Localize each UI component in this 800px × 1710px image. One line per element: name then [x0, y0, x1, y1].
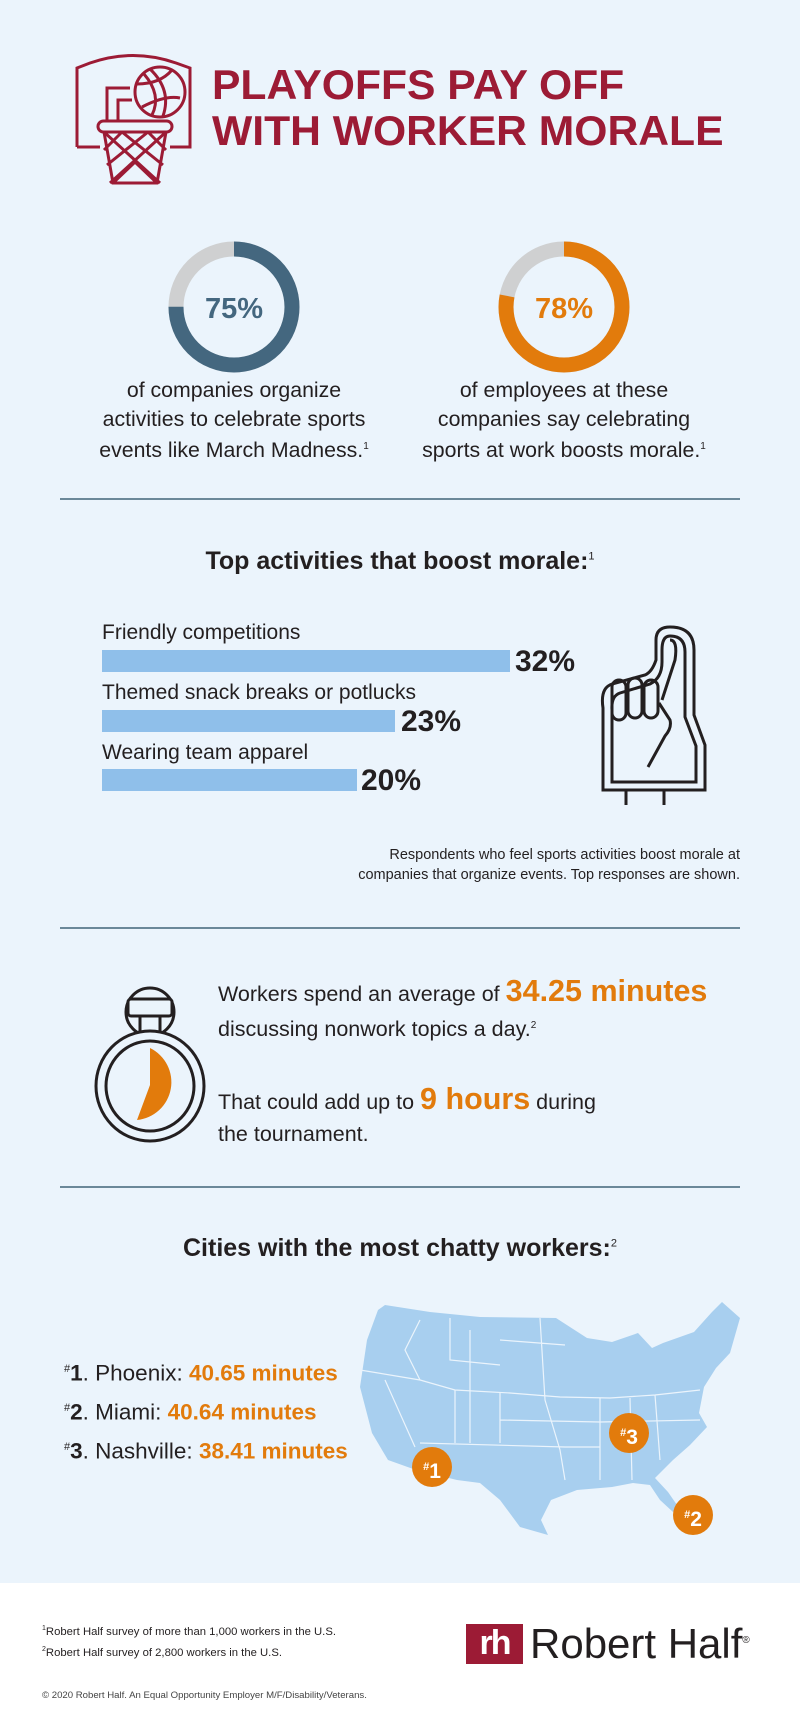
donut: 75%	[168, 242, 300, 372]
marker: #3	[609, 1413, 649, 1453]
heading: cities: Cities with the most chatty workers:2	[183, 1234, 617, 1262]
footer	[0, 1583, 800, 1710]
marker: #1: #1	[423, 1460, 441, 1483]
list: cities: #1. Phoenix: 40.65 minutes	[64, 1360, 338, 1386]
text: companies stat: events like March Madness.1	[99, 438, 369, 462]
bar: team apparel	[102, 741, 421, 797]
icon: stopwatch	[94, 986, 206, 1142]
bar: themed snack breaks: 23%	[401, 705, 461, 738]
text: employees stat: companies say celebrating	[438, 406, 690, 430]
list: cities: #3. Nashville: 38.41 minutes	[64, 1438, 348, 1464]
bar: team apparel: 20%	[361, 764, 421, 797]
marker: #1	[412, 1447, 452, 1487]
text: 9 hours: the tournament.	[218, 1122, 369, 1146]
marker: #3: #3	[620, 1426, 638, 1449]
footnotes	[42, 1625, 336, 1659]
bar: themed snack breaks: Themed snack breaks or potlucks	[102, 681, 416, 704]
note: respondents: Respondents who feel sports activities boost morale at	[389, 847, 740, 863]
map: US	[360, 1302, 740, 1535]
bar: friendly competitions: Friendly competitions	[102, 621, 300, 644]
title: PLAYOFFS PAY OFF	[212, 61, 624, 108]
title: WITH WORKER MORALE	[212, 107, 724, 154]
icon: foam finger	[600, 626, 706, 805]
list: cities	[64, 1360, 348, 1464]
bar: team apparel: Wearing team apparel	[102, 741, 308, 764]
text: companies stat: of companies organize	[127, 378, 341, 402]
marker: #2: #2	[684, 1508, 702, 1531]
footnotes: 2Robert Half survey of 2,800 workers in the U.S.	[42, 1646, 282, 1659]
title	[212, 61, 724, 154]
text: employees stat	[422, 378, 706, 462]
heading: top activities: Top activities that boost morale:1	[205, 547, 595, 575]
marker: #2	[673, 1495, 713, 1535]
text: 9 hours	[218, 1082, 596, 1146]
bar: themed snack breaks	[102, 681, 461, 738]
text: 9 hours: That could add up to 9 hours during	[218, 1082, 596, 1116]
bar: friendly competitions	[102, 621, 575, 678]
copyright: © 2020 Robert Half. An Equal Opportunity Employer M/F/Disability/Veterans.	[42, 1690, 367, 1701]
logo: Robert Half: rh	[480, 1624, 510, 1662]
donut: 78%: 78%	[535, 293, 593, 325]
text: 34.25 minutes: Workers spend an average of 34.25 minutes	[218, 974, 707, 1008]
text: companies stat	[99, 378, 369, 462]
text: employees stat: sports at work boosts morale.1	[422, 438, 706, 462]
icon: basketball hoop	[76, 54, 192, 184]
footnotes: 1Robert Half survey of more than 1,000 workers in the U.S.	[42, 1625, 336, 1638]
donut: 78%	[498, 242, 630, 372]
note: respondents	[358, 847, 740, 883]
donut: 75%: 75%	[205, 293, 263, 325]
text: companies stat: activities to celebrate sports	[103, 406, 365, 430]
list: cities: #2. Miami: 40.64 minutes	[64, 1400, 316, 1424]
bar chart	[102, 621, 575, 797]
logo: Robert Half: Robert Half®	[530, 1620, 750, 1667]
note: respondents: companies that organize events. Top responses are shown.	[358, 867, 740, 883]
text: 34.25 minutes: discussing nonwork topics a day.2	[218, 1017, 536, 1041]
text: 34.25 minutes	[218, 974, 707, 1041]
bar: friendly competitions: 32%	[515, 645, 575, 678]
text: employees stat: of employees at these	[460, 378, 668, 402]
